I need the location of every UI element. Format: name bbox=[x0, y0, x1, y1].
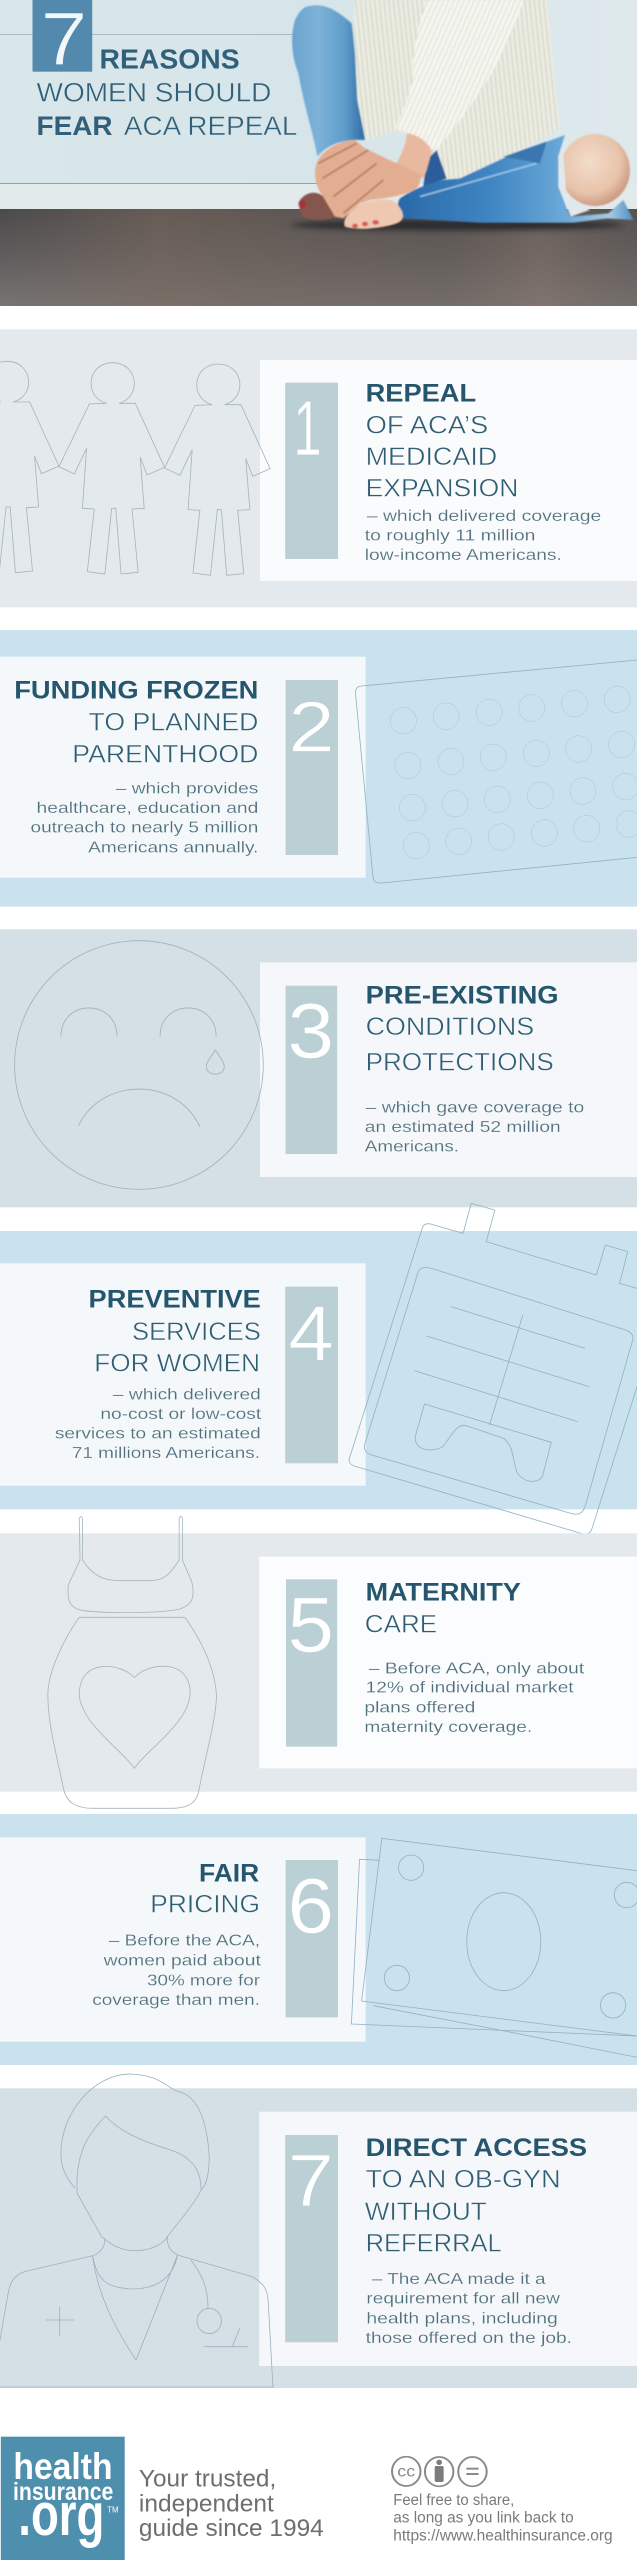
number box 4: 4 bbox=[288, 1289, 334, 1377]
reason 2 card bbox=[0, 657, 366, 878]
heading 4: SERVICES bbox=[132, 1317, 261, 1345]
icon: birth control pill pack bbox=[355, 660, 637, 883]
photo: seated woman bbox=[290, 0, 633, 230]
icon: creative commons licence bbox=[392, 2457, 487, 2486]
logo: healthinsurance.org bbox=[1, 2437, 125, 2560]
share note bbox=[393, 2492, 613, 2544]
body text 6: coverage than men. bbox=[92, 1991, 260, 2009]
number box 3: 3 bbox=[288, 986, 334, 1074]
body text 1: low-income Americans. bbox=[365, 546, 562, 564]
hero photo background bbox=[0, 0, 637, 306]
panel: reason 3 bbox=[0, 929, 637, 1207]
panel: reason 4 bbox=[0, 1203, 637, 1534]
heading 5: MATERNITY bbox=[366, 1577, 521, 1606]
body text 6: women paid about bbox=[103, 1951, 261, 1969]
body text 5: maternity coverage. bbox=[364, 1718, 532, 1736]
body text 3: Americans. bbox=[365, 1137, 459, 1155]
body text 5: plans offered bbox=[364, 1698, 475, 1716]
number box 1: 1 bbox=[293, 384, 322, 472]
title text: FEAR bbox=[37, 112, 113, 141]
reason 7 card bbox=[259, 2112, 637, 2366]
body text 4: – which delivered bbox=[113, 1385, 261, 1403]
share note: Feel free to share, bbox=[393, 2492, 514, 2509]
icon: pregnant woman's dress with heart bbox=[48, 1516, 217, 1808]
body text 1 bbox=[365, 507, 601, 564]
body text 7: – The ACA made it a bbox=[372, 2270, 546, 2288]
body text 7: requirement for all new bbox=[366, 2289, 560, 2307]
number box 3 bbox=[286, 986, 337, 1154]
icon: female doctor with stethoscope bbox=[0, 2074, 273, 2388]
heading 3: CONDITIONS bbox=[366, 1012, 534, 1040]
icon: creative commons licence: cc bbox=[397, 2462, 415, 2480]
title text: ACA REPEAL bbox=[124, 112, 297, 141]
body text 1: to roughly 11 million bbox=[365, 526, 535, 544]
panel: reason 6 bbox=[0, 1814, 637, 2065]
reason 1 card bbox=[260, 360, 637, 581]
number box 5 bbox=[286, 1579, 337, 1747]
number box 7: 7 bbox=[288, 2140, 334, 2222]
body text 7: health plans, including bbox=[366, 2309, 558, 2327]
heading 2: TO PLANNED bbox=[89, 707, 258, 736]
body text 4 bbox=[55, 1385, 261, 1462]
heading 3 bbox=[366, 980, 559, 1076]
body text 5: 12% of individual market bbox=[366, 1678, 574, 1696]
number box 2: 2 bbox=[288, 687, 335, 767]
body text 5: – Before ACA, only about bbox=[369, 1659, 584, 1677]
share note: as long as you link back to bbox=[393, 2509, 574, 2526]
hero title bbox=[33, 0, 297, 141]
logo: healthinsurance.org: insurance bbox=[13, 2477, 113, 2505]
reason 3 card bbox=[260, 962, 637, 1177]
heading 3: PROTECTIONS bbox=[366, 1047, 554, 1076]
number box 5: 5 bbox=[288, 1581, 334, 1669]
body text 3: an estimated 52 million bbox=[365, 1118, 561, 1136]
heading 5: CARE bbox=[365, 1609, 437, 1638]
tagline: Your trusted, bbox=[139, 2465, 276, 2492]
heading 2 bbox=[14, 675, 258, 768]
body text 3 bbox=[365, 1098, 584, 1155]
body text 3: – which gave coverage to bbox=[366, 1098, 584, 1116]
heading 4 bbox=[89, 1284, 261, 1377]
heading 1: REPEAL bbox=[366, 378, 476, 407]
number box 6: 6 bbox=[288, 1862, 334, 1950]
panel: reason 5 bbox=[0, 1516, 637, 1808]
heading 5 bbox=[365, 1577, 521, 1638]
icon: medical chart clipboard bbox=[349, 1203, 637, 1534]
heading 3: PRE-EXISTING bbox=[366, 980, 559, 1009]
panel: hero photo with title bbox=[0, 0, 637, 306]
body text 7 bbox=[366, 2270, 572, 2347]
heading 6 bbox=[150, 1858, 260, 1918]
title text: WOMEN SHOULD bbox=[37, 78, 271, 108]
heading 7: REFERRAL bbox=[366, 2228, 502, 2257]
body text 6: – Before the ACA, bbox=[109, 1931, 260, 1949]
body text 2: outreach to nearly 5 million bbox=[30, 818, 258, 836]
number box 7 bbox=[285, 2135, 338, 2342]
body text 4: no-cost or low-cost bbox=[100, 1405, 261, 1423]
number box 6 bbox=[286, 1860, 338, 2017]
panel: footer bbox=[1, 2437, 613, 2560]
heading 2: FUNDING FROZEN bbox=[14, 675, 258, 704]
body text 2: healthcare, education and bbox=[37, 799, 258, 817]
body text 4: 71 millions Americans. bbox=[72, 1444, 260, 1462]
heading 7: WITHOUT bbox=[365, 2197, 487, 2225]
panel: reason 2 bbox=[0, 630, 637, 907]
number box 2 bbox=[286, 680, 338, 855]
reason 5 card bbox=[259, 1557, 637, 1768]
heading 7: DIRECT ACCESS bbox=[366, 2133, 587, 2161]
heading 1: OF ACA’S bbox=[366, 410, 488, 439]
body text 2: Americans annually. bbox=[88, 838, 258, 856]
icon: three people holding hands bbox=[0, 361, 270, 575]
icon: stacked paper money bbox=[351, 1838, 637, 2057]
icon: crying face bbox=[15, 941, 263, 1189]
heading 4: FOR WOMEN bbox=[94, 1348, 260, 1377]
body text 2: – which provides bbox=[116, 779, 258, 797]
number box 1 bbox=[285, 383, 338, 559]
body text 6: 30% more for bbox=[147, 1971, 260, 1989]
logo: healthinsurance.org: health bbox=[13, 2445, 113, 2487]
heading 1: EXPANSION bbox=[366, 473, 518, 502]
heading 6: PRICING bbox=[150, 1889, 260, 1918]
number box 4 bbox=[285, 1287, 338, 1463]
logo: healthinsurance.org: .org bbox=[18, 2481, 104, 2548]
tagline bbox=[139, 2465, 324, 2541]
body text 4: services to an estimated bbox=[55, 1424, 261, 1442]
tagline: guide since 1994 bbox=[139, 2514, 324, 2541]
heading 4: PREVENTIVE bbox=[89, 1284, 261, 1313]
body text 2 bbox=[30, 779, 258, 856]
panel: reason 1 bbox=[0, 329, 637, 607]
reason 4 card bbox=[0, 1263, 366, 1486]
body text 5 bbox=[364, 1659, 584, 1736]
title text: REASONS bbox=[100, 44, 240, 75]
heading 1: MEDICAID bbox=[366, 442, 497, 470]
heading 6: FAIR bbox=[199, 1858, 259, 1887]
panel: reason 7 bbox=[0, 2074, 637, 2388]
title text bbox=[37, 44, 297, 141]
heading 1 bbox=[366, 378, 518, 502]
reason 6 card bbox=[0, 1837, 366, 2042]
logo: healthinsurance.org: TM bbox=[107, 2505, 119, 2514]
heading 2: PARENTHOOD bbox=[72, 739, 258, 768]
body text 1: – which delivered coverage bbox=[367, 507, 601, 525]
body text 6 bbox=[92, 1931, 261, 2009]
heading 7: TO AN OB-GYN bbox=[366, 2164, 561, 2193]
heading 7 bbox=[365, 2133, 587, 2257]
tagline: independent bbox=[139, 2490, 274, 2517]
body text 7: those offered on the job. bbox=[366, 2329, 572, 2347]
